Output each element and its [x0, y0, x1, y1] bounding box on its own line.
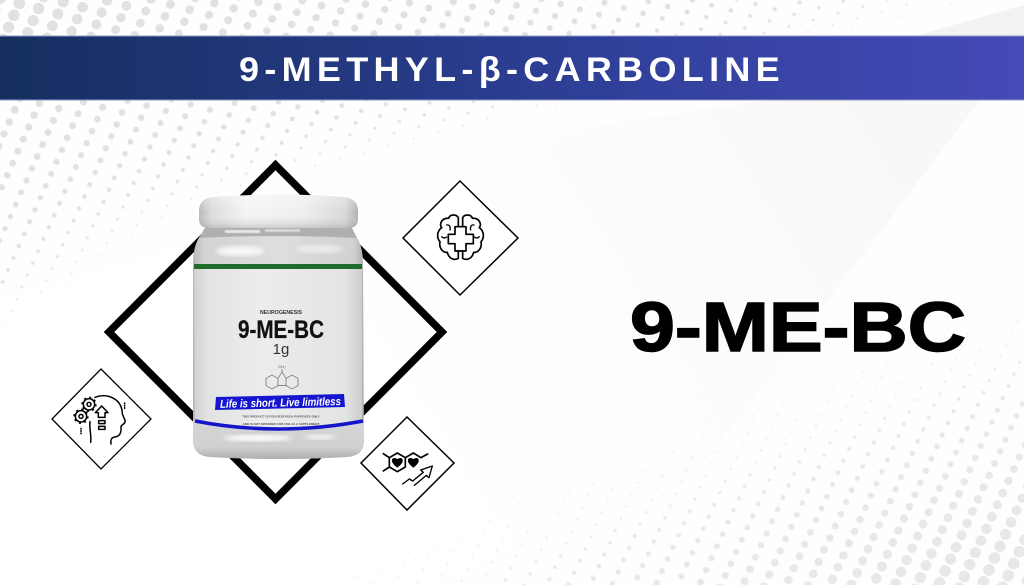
jar label — [194, 267, 362, 429]
background: halftone dot pattern, upper left — [0, 0, 162, 336]
banner title text: 9-METHYL-β-CARBOLINE — [239, 51, 785, 89]
jar quantity: 1g — [273, 341, 289, 358]
jar lid — [199, 194, 358, 228]
blue curve band — [195, 421, 363, 429]
blue slogan banner: Life is short. Live limitless — [220, 396, 341, 411]
jar neck — [199, 226, 357, 238]
main heading: 9-ME-BC — [630, 288, 966, 366]
small print — [242, 414, 320, 426]
jar body — [193, 236, 364, 459]
green band — [194, 264, 362, 269]
small print: AND IS NOT INTENDED FOR USE AS A SUPPLEMENT — [243, 422, 320, 426]
icon: head with gears and up arrow — [52, 369, 151, 469]
molecule structure: CH₃ — [278, 364, 286, 369]
small print: THIS PRODUCT IS FOR RESEARCH PURPOSES ONLY — [242, 414, 320, 418]
icon: molecule with hearts and rising arrow — [361, 417, 454, 510]
background: halftone dot pattern, lower right — [247, 267, 1024, 585]
brand name: NEUROGENESIS — [260, 310, 302, 316]
background: halftone dot pattern, top strip — [58, 0, 952, 200]
jar upper highlights — [216, 246, 264, 256]
molecule structure — [266, 364, 298, 389]
product jar — [193, 194, 364, 459]
icon: brain with medical cross — [403, 181, 518, 295]
large black diamond frame — [109, 165, 442, 499]
jar product name: 9-ME-BC — [238, 316, 324, 344]
jar lower powder area — [193, 420, 364, 459]
title banner — [0, 36, 1024, 100]
